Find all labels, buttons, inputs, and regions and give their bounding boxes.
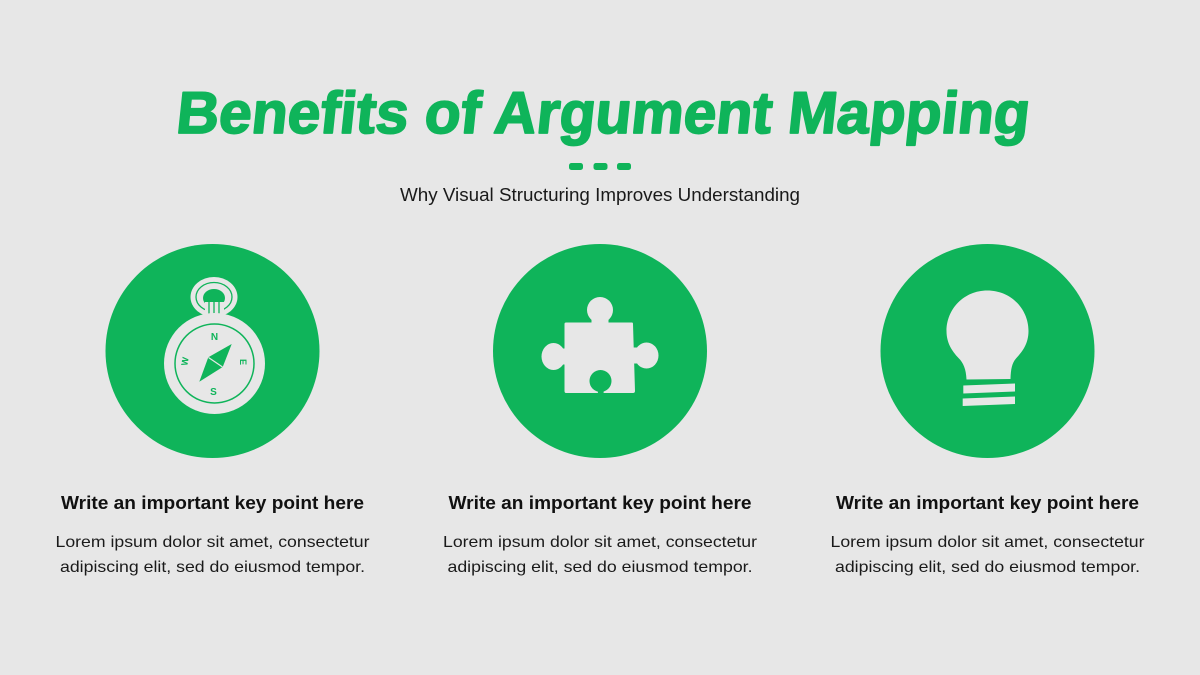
body text: adipiscing elit, sed do eiusmod tempor. bbox=[448, 559, 752, 576]
body text: Lorem ipsum dolor sit amet, consectetur bbox=[830, 534, 1145, 551]
subtitle: Why Visual Structuring Improves Understanding bbox=[400, 185, 800, 205]
body text bbox=[56, 534, 370, 576]
body text: Lorem ipsum dolor sit amet, consectetur bbox=[56, 534, 370, 551]
key point heading: Write an important key point here bbox=[61, 493, 364, 513]
body text bbox=[830, 534, 1145, 576]
body text: Lorem ipsum dolor sit amet, consectetur bbox=[443, 534, 758, 551]
icon: puzzle piece bbox=[493, 244, 707, 458]
icon: compass: S bbox=[210, 387, 217, 398]
body text: adipiscing elit, sed do eiusmod tempor. bbox=[835, 559, 1140, 576]
body text: adipiscing elit, sed do eiusmod tempor. bbox=[60, 559, 365, 576]
icon: compass: E bbox=[238, 359, 248, 365]
panel: light bulb benefit bbox=[830, 244, 1145, 576]
icon: light bulb bbox=[880, 244, 1094, 458]
body text bbox=[443, 534, 758, 576]
key point heading: Write an important key point here bbox=[836, 493, 1139, 513]
panel: compass benefit bbox=[56, 244, 370, 576]
panel: puzzle benefit bbox=[443, 244, 758, 576]
icon: compass: W bbox=[179, 356, 191, 367]
title accent dashes bbox=[569, 163, 631, 170]
key point heading: Write an important key point here bbox=[448, 493, 752, 513]
title: Benefits of Argument Mapping bbox=[174, 79, 1034, 146]
icon: compass: N bbox=[211, 332, 218, 343]
icon: compass bbox=[106, 244, 320, 458]
